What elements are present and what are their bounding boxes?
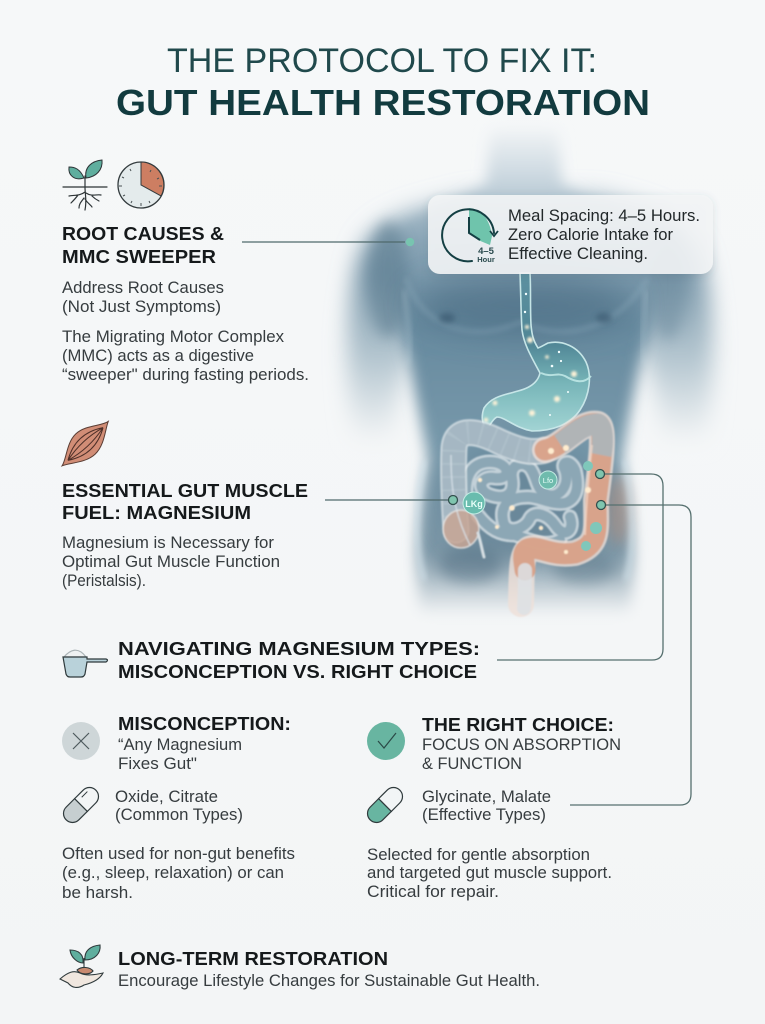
text block: long-term restoration: Encourage Lifestyle Changes for Sustainable Gut Health. bbox=[118, 972, 540, 990]
text block: root causes and MMC sweeper: Address Root Causes bbox=[62, 279, 224, 297]
icon: sprout in hand bbox=[60, 945, 103, 987]
callout: meal spacing: Zero Calorie Intake for bbox=[508, 226, 674, 244]
text block: long-term restoration bbox=[118, 949, 540, 990]
icon: plant with roots bbox=[63, 160, 107, 210]
text block: misconception: “Any Magnesium bbox=[118, 736, 242, 754]
illustration: small intestine bbox=[466, 462, 577, 543]
illustration: magnesium ions: Lfo bbox=[543, 476, 553, 485]
icon: muscle bbox=[53, 412, 118, 476]
text block: right choice bbox=[422, 715, 621, 773]
title: THE PROTOCOL TO FIX IT: bbox=[167, 42, 597, 80]
text block: right choice: FOCUS ON ABSORPTION bbox=[422, 736, 621, 754]
text block: essential gut muscle fuel: FUEL: MAGNESIUM bbox=[62, 503, 251, 523]
text block: common types: Oxide, Citrate bbox=[115, 788, 218, 806]
text block: essential gut muscle fuel: Magnesium is Necessary for bbox=[62, 534, 275, 552]
text block: essential gut muscle fuel bbox=[62, 481, 308, 590]
icon: 4-5 hour clock bbox=[442, 208, 498, 264]
illustration: magnesium ions bbox=[463, 461, 602, 551]
text block: effective types bbox=[422, 788, 551, 824]
illustration: large intestine bbox=[443, 424, 603, 608]
text block: essential gut muscle fuel: ESSENTIAL GUT MUSCLE bbox=[62, 481, 308, 501]
text block: root causes and MMC sweeper: “sweeper" during fasting periods. bbox=[62, 366, 309, 384]
connector: root causes to shoulder bbox=[242, 238, 414, 246]
text block: misconception explanation: be harsh. bbox=[62, 884, 133, 902]
callout: meal spacing: Effective Cleaning. bbox=[508, 245, 648, 263]
icon: 4-5 hour clock: 4–5 bbox=[478, 246, 495, 257]
text block: long-term restoration: LONG-TERM RESTORATION bbox=[118, 949, 388, 969]
text block: root causes and MMC sweeper: ROOT CAUSES & bbox=[62, 224, 224, 244]
callout: meal spacing bbox=[428, 195, 713, 274]
text block: root causes and MMC sweeper: (Not Just Symptoms) bbox=[62, 298, 221, 316]
text block: root causes and MMC sweeper: MMC SWEEPER bbox=[62, 247, 216, 267]
text block: misconception explanation: Often used for non-gut benefits bbox=[62, 845, 295, 863]
icon: 4-5 hour clock: Hour bbox=[477, 255, 495, 264]
callout: meal spacing: Meal Spacing: 4–5 Hours. bbox=[508, 207, 700, 225]
connector: magnesium to intestine bbox=[325, 496, 458, 504]
illustration: esophagus and stomach bbox=[482, 273, 591, 431]
icon: fasting clock bbox=[118, 162, 164, 208]
title: GUT HEALTH RESTORATION bbox=[116, 82, 650, 123]
text block: right choice explanation: and targeted gut muscle support. bbox=[367, 864, 612, 882]
heading: navigating magnesium types bbox=[118, 639, 480, 682]
text block: root causes and MMC sweeper: The Migrating Motor Complex bbox=[62, 328, 285, 346]
icon: misconception cross bbox=[62, 722, 100, 760]
icon: measuring scoop bbox=[63, 650, 108, 677]
text block: effective types: Glycinate, Malate bbox=[422, 788, 551, 806]
text block: right choice explanation bbox=[367, 846, 612, 901]
text block: common types: (Common Types) bbox=[115, 806, 243, 824]
icon: right choice check bbox=[367, 722, 405, 760]
connector: right choice types to colon bbox=[570, 500, 691, 805]
connector: navigating types to colon bbox=[497, 470, 663, 660]
text block: right choice explanation: Selected for gentle absorption bbox=[367, 846, 590, 864]
text block: common types bbox=[115, 788, 243, 824]
text block: right choice: & FUNCTION bbox=[422, 755, 522, 773]
text block: root causes and MMC sweeper: (MMC) acts as a digestive bbox=[62, 347, 254, 365]
text block: effective types: (Effective Types) bbox=[422, 806, 546, 824]
text block: root causes and MMC sweeper bbox=[62, 224, 309, 384]
text block: misconception: MISCONCEPTION: bbox=[118, 714, 291, 734]
illustration: magnesium ions: LKg bbox=[465, 499, 483, 509]
text block: essential gut muscle fuel: Optimal Gut Muscle Function bbox=[62, 553, 280, 571]
text block: misconception explanation bbox=[62, 845, 295, 902]
text block: essential gut muscle fuel: (Peristalsis). bbox=[62, 572, 146, 590]
text block: right choice: THE RIGHT CHOICE: bbox=[422, 715, 614, 735]
heading: navigating magnesium types: MISCONCEPTION VS. RIGHT CHOICE bbox=[118, 662, 477, 682]
heading: navigating magnesium types: NAVIGATING MAGNESIUM TYPES: bbox=[118, 639, 480, 659]
illustration: translucent human torso bbox=[347, 130, 713, 615]
text block: misconception explanation: (e.g., sleep, relaxation) or can bbox=[62, 864, 284, 882]
title bbox=[116, 42, 650, 123]
icon: effective types capsule bbox=[364, 784, 406, 826]
icon: common types capsule bbox=[60, 784, 102, 826]
text block: right choice explanation: Critical for repair. bbox=[367, 883, 499, 901]
text block: misconception bbox=[118, 714, 291, 773]
text block: misconception: Fixes Gut" bbox=[118, 755, 197, 773]
